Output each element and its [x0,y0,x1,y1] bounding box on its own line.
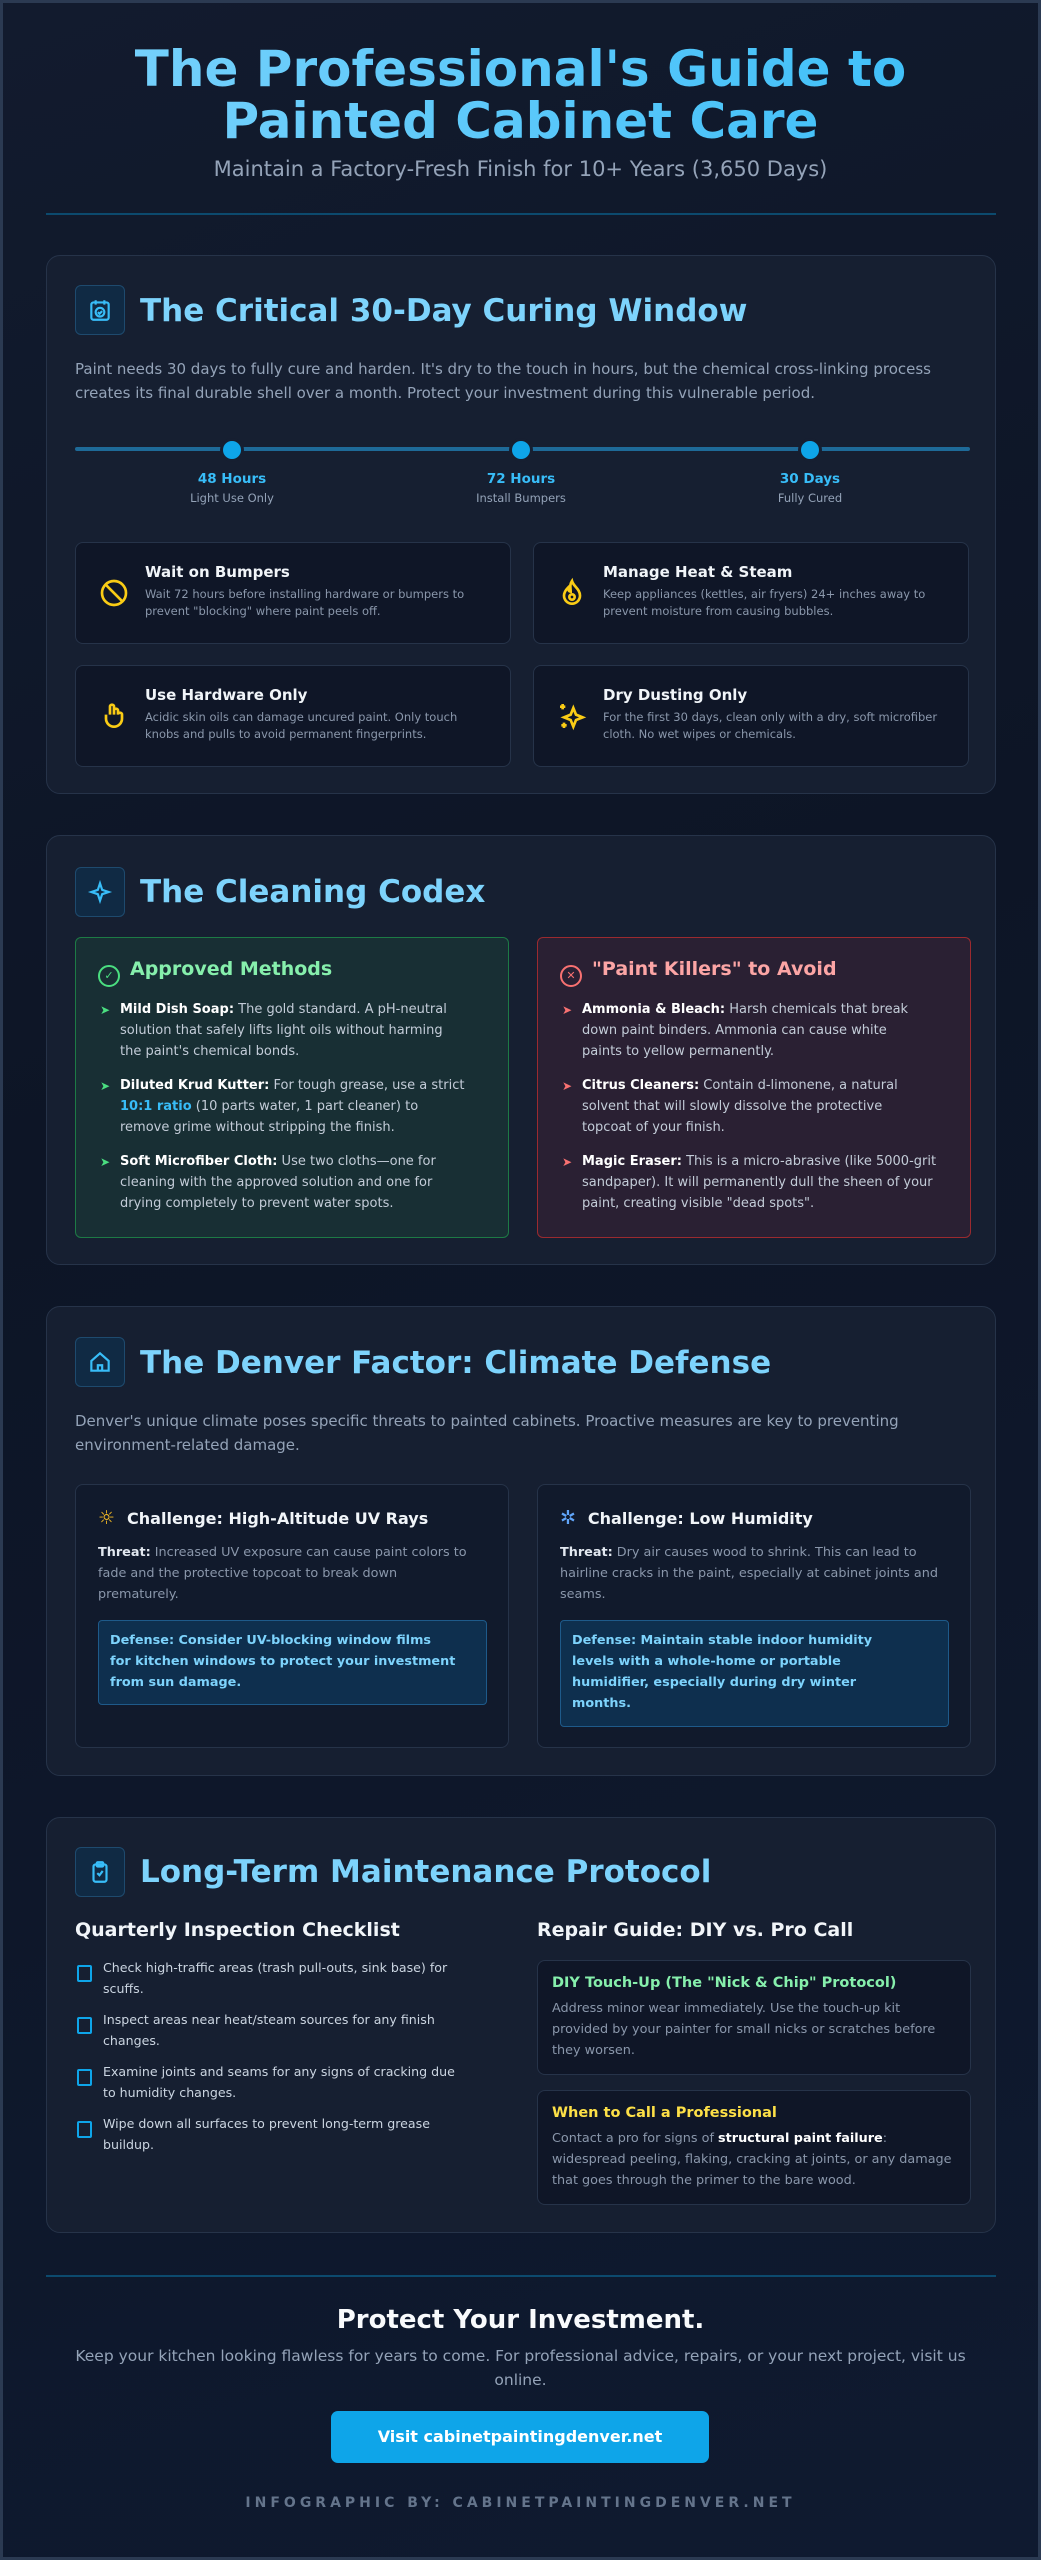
intro text: Paint needs 30 days to fully cure and harden. It's dry to the touch in hours, but the chemical cross-linking process creates its final durable shell over a month. Protect your investment during this vulnerable period. [75,360,931,402]
pro call box [537,2090,971,2205]
icon: house [75,1337,125,1387]
timeline: 30 Days [780,471,840,487]
credit: INFOGRAPHIC BY: CABINETPAINTINGDENVER.NET [245,2495,796,2511]
icon: sparkle [75,867,125,917]
approved methods box: Mild Dish Soap: The gold standard. A pH-neutral solution that safely lifts light oils without harming the paint's chemical bonds. [120,1002,447,1059]
paint killers box: ✕ [566,969,576,982]
timeline: Light Use Only [190,491,274,505]
button [331,2411,709,2463]
paint killers box: "Paint Killers" to Avoid [592,958,837,980]
tip: hardware only: Use Hardware Only [145,686,307,704]
paint killers box: ➤ [562,1079,572,1093]
tip: dry dusting: Dry Dusting Only [603,686,747,704]
title: The Professional's Guide to [135,40,906,98]
approved methods box: ✓ [104,969,114,982]
challenge: humidity [537,1484,971,1748]
challenge: UV: ☼ Challenge: High-Altitude UV Rays [98,1507,428,1529]
timeline: 72 Hours [487,471,555,487]
challenge: humidity: Threat: Dry air causes wood to shrink. This can lead to hairline cracks in the paint, especially at cabinet joints and seams. [560,1545,938,1602]
paint killers box: Magic Eraser: This is a micro-abrasive (like 5000-grit sandpaper). It will permanently dull the sheen of your paint, creating visible "dead spots". [582,1154,936,1211]
title [3,43,1038,147]
DIY box: DIY Touch-Up (The "Nick & Chip" Protocol) [552,1975,896,1991]
panel: long-term maintenance [46,1817,996,2233]
challenge: UV: Defense: Consider UV-blocking window films for kitchen windows to protect your investment from sun damage. [110,1633,455,1690]
tip: dry dusting: For the first 30 days, clean only with a dry, soft microfiber cloth. No wet wipes or chemicals. [603,710,937,741]
approved methods box: Diluted Krud Kutter: For tough grease, use a strict 10:1 ratio (10 parts water, 1 part cleaner) to remove grime without stripping the finish. [120,1078,464,1135]
tip: heat & steam: Manage Heat & Steam [603,563,792,581]
approved methods box: Approved Methods [130,958,332,980]
checklist: Examine joints and seams for any signs of cracking due to humidity changes. [103,2064,455,2100]
paint killers box: Ammonia & Bleach: Harsh chemicals that break down paint binders. Ammonia can cause white paints to yellow permanently. [582,1002,908,1059]
button: Visit cabinetpaintingdenver.net [378,2427,662,2446]
footer text: Keep your kitchen looking flawless for years to come. For professional advice, repairs, or your next project, visit us online. [75,2347,966,2389]
paint killers box [537,937,971,1238]
heading: The Denver Factor: Climate Defense [140,1345,771,1381]
tip: wait on bumpers: Wait on Bumpers [145,563,290,581]
heading: Long-Term Maintenance Protocol [140,1854,711,1890]
paint killers box: ➤ [562,1003,572,1017]
tip: wait on bumpers: Wait 72 hours before installing hardware or bumpers to prevent "blocking" where paint peels off. [145,587,464,618]
challenge: humidity: ✲ Challenge: Low Humidity [560,1507,813,1529]
tip: dry dusting [533,665,969,767]
timeline [75,441,970,505]
panel: denver factor [46,1306,996,1776]
DIY box: Address minor wear immediately. Use the touch-up kit provided by your painter for small nicks or scratches before they worsen. [552,2001,935,2058]
checklist: Inspect areas near heat/steam sources for any finish changes. [103,2012,435,2048]
icon: clipboard [75,1847,125,1897]
icon: calendar [75,285,125,335]
approved methods box [75,937,509,1238]
challenge: UV [75,1484,509,1748]
timeline: Fully Cured [778,491,842,505]
panel: cleaning codex [46,835,996,1265]
tip: heat & steam: Keep appliances (kettles, air fryers) 24+ inches away to prevent moisture from causing bubbles. [603,587,925,618]
footer heading: Protect Your Investment. [337,2305,704,2335]
intro text: Denver's unique climate poses specific threats to painted cabinets. Proactive measures are key to preventing environment-related damage. [75,1412,899,1454]
checklist: Check high-traffic areas (trash pull-outs, sink base) for scuffs. [103,1960,447,1996]
paint killers box: ➤ [562,1155,572,1169]
tip: wait on bumpers [75,542,511,644]
pro call box: Contact a pro for signs of structural paint failure: widespread peeling, flaking, cracking at joints, or any damage that goes through the primer to the bare wood. [552,2131,952,2188]
checklist: Wipe down all surfaces to prevent long-term grease buildup. [103,2116,430,2152]
subtitle: Maintain a Factory-Fresh Finish for 10+ Years (3,650 Days) [214,157,827,181]
tip: heat & steam [533,542,969,644]
approved methods box: ➤ [100,1003,110,1017]
approved methods box: Soft Microfiber Cloth: Use two cloths—one for cleaning with the approved solution and one for drying completely to prevent water spots. [120,1154,436,1211]
heading: The Critical 30-Day Curing Window [140,293,747,329]
pro call box: When to Call a Professional [552,2105,777,2121]
panel: curing window [46,255,996,794]
checklist heading: Quarterly Inspection Checklist [75,1919,400,1941]
timeline: 48 Hours [198,471,266,487]
challenge: humidity: Defense: Maintain stable indoor humidity levels with a whole-home or portable humidifier, especially during dry winter months. [572,1633,872,1711]
checklist [77,1960,455,2152]
heading: The Cleaning Codex [140,874,485,910]
tip: hardware only: Acidic skin oils can damage uncured paint. Only touch knobs and pulls to avoid permanent fingerprints. [145,710,457,741]
timeline: Install Bumpers [476,491,566,505]
approved methods box: ➤ [100,1155,110,1169]
challenge: UV: Threat: Increased UV exposure can cause paint colors to fade and the protective topcoat to break down prematurely. [98,1545,467,1602]
title: Painted Cabinet Care [222,92,818,150]
paint killers box: Citrus Cleaners: Contain d-limonene, a natural solvent that will slowly dissolve the protective topcoat of your finish. [582,1078,898,1135]
DIY box [537,1960,971,2075]
tip: hardware only [75,665,511,767]
repair guide heading: Repair Guide: DIY vs. Pro Call [537,1919,853,1941]
approved methods box: ➤ [100,1079,110,1093]
